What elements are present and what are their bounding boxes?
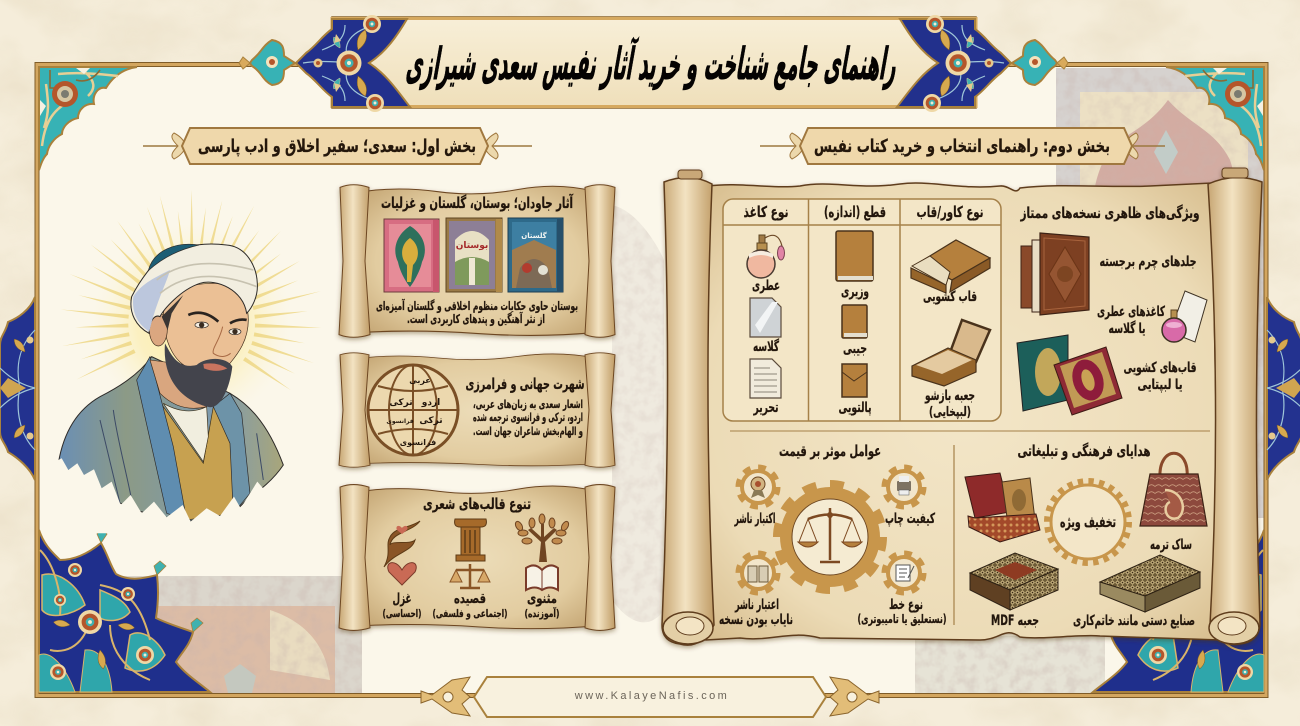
big gear with scales (778, 485, 882, 589)
icon: envelope book (842, 364, 867, 397)
section heading: part one (143, 128, 532, 164)
gear: print quality (885, 468, 923, 506)
brows and eyes (188, 313, 247, 356)
scroll right roll (1208, 168, 1262, 645)
heading: آثار جاودان؛ بوستان، گلستان و غزلیات (381, 194, 574, 212)
corner ornament: top left (39, 67, 137, 170)
medallion: left (239, 40, 295, 85)
footer knot: right (830, 677, 879, 716)
icon: column and scales (450, 519, 490, 588)
label: perfumed paper: کاغذهای عطری (1097, 304, 1166, 320)
scroll paper (706, 183, 1220, 640)
halo (61, 190, 322, 423)
description: بوستان حاوی حکایات منظوم اخلاقی و گلستان آمیزه‌ای (376, 298, 578, 314)
icon: perfume bottle (747, 235, 784, 278)
scroll panel: global fame (339, 353, 615, 467)
turban (131, 244, 257, 333)
label: tahrir: تحریر (753, 400, 778, 416)
label: vaziri: وزیری (841, 284, 869, 300)
label: ghazal: غزل (392, 591, 412, 607)
neck (150, 360, 213, 408)
robe collars (137, 357, 187, 520)
scroll panel: timeless works (339, 185, 615, 337)
label: hinged box: جعبه بازشو (924, 388, 975, 404)
globe: فرانسوی (400, 438, 436, 447)
label: publisher credit: اکتبار ناشر (734, 511, 776, 527)
description line 2: از نثر آهنگین و پندهای کاربردی است. (407, 311, 545, 327)
scroll left roll (662, 170, 714, 645)
banner ornament: left (296, 15, 410, 112)
description line 3: و الهام‌بخش شاعران جهان است. (473, 424, 583, 439)
globe: ترکی (419, 416, 443, 426)
special discount badge (1047, 481, 1129, 563)
scroll background (339, 485, 615, 630)
column heading: size: قطع (اندازه) (824, 203, 886, 221)
globe: عربی (409, 376, 431, 385)
corner ornament: bottom right (1093, 529, 1264, 692)
mouth (203, 363, 227, 371)
book: bustan (446, 218, 502, 292)
side medallion: right (1267, 297, 1300, 480)
column heading: paper: نوع کاغذ (744, 203, 788, 221)
book: golestan: گلستان (521, 231, 548, 240)
faded carpet: bottom left (114, 576, 362, 693)
globe: ترکی (389, 398, 413, 408)
gear: script type (885, 554, 923, 592)
label: rarity: نایاب بودن نسخه (719, 612, 793, 628)
scroll panel: poetic forms (339, 485, 615, 630)
portrait of Saadi (50, 190, 322, 533)
label: pocket: جیبی (843, 341, 867, 357)
label: MDF box: جعبه MDF (991, 613, 1039, 629)
globe: فرانسوی (386, 418, 414, 425)
book: golestan (508, 218, 563, 292)
icon: glossy paper (750, 298, 781, 337)
beard (165, 343, 232, 407)
hair (162, 295, 183, 330)
scroll background (339, 185, 615, 337)
label: hinged box note: (لبپخایی) (929, 405, 971, 420)
icon: pocket book (842, 305, 867, 338)
icon: open box (912, 320, 990, 386)
label: paltoyi: پالتویی (838, 400, 872, 416)
icon: writing paper (750, 359, 781, 398)
label: handcrafts: صنایع دستی مانند خاتم‌کاری (1073, 613, 1195, 629)
label: qasideh note: (اجتماعی و فلسفی) (432, 608, 508, 620)
banner ornament: right (897, 15, 1011, 112)
ear (149, 313, 167, 346)
globe (368, 365, 458, 455)
painterly fade at robe hem (50, 458, 297, 533)
faded carpet: centre strip behind scrolls (612, 205, 664, 622)
label: print quality: کیفیت چاپ (885, 511, 936, 527)
corner ornament: top right (1166, 67, 1264, 170)
section heading text: بخش دوم: راهنمای انتخاب و خرید کتاب نفیس (814, 136, 1110, 157)
icon: teal and red books (1017, 335, 1122, 415)
label: script type: نوع خط (889, 597, 923, 613)
label: termeh bag: ساک ترمه (1150, 537, 1192, 553)
book: ghazaliyat (384, 219, 439, 292)
icon: MDF box (970, 553, 1058, 610)
badge text: تخفیف ویژه (1060, 513, 1116, 531)
label: glossy: گلاسه (753, 338, 780, 355)
label: slipcase: قاب کشویی (923, 289, 977, 305)
corner ornament: bottom left (39, 529, 210, 692)
section heading text: بخش اول: سعدی؛ سفیر اخلاق و ادب پارسی (198, 136, 476, 157)
icon: calligraphy and heart (384, 521, 420, 585)
icon: paper and perfume (1162, 291, 1207, 342)
tunic (150, 383, 233, 520)
gear: publisher reputation (739, 468, 777, 506)
shirt (163, 403, 208, 462)
label: perfumed: عطری (752, 278, 780, 294)
side medallion: left (0, 297, 35, 480)
gear: rarity (739, 554, 777, 592)
medallion: right (1012, 40, 1068, 85)
website address: www.KalayeNafis.com (574, 690, 729, 702)
scroll panel: buying guide (662, 168, 1262, 645)
label: or lap-style: یا لبپتایی (1138, 377, 1182, 393)
label: script note: (نستعلیق یا تامیبوتری) (858, 612, 946, 627)
icon: slipcase (911, 240, 990, 293)
table of book options (723, 199, 1001, 421)
title banner (239, 15, 1068, 112)
icon: termeh bag (1140, 453, 1207, 526)
footer plaque (421, 677, 879, 717)
label: masnavi note: (آموزنده) (524, 607, 560, 620)
section heading: part two (760, 128, 1165, 164)
description line 2: اردو، ترکی و فرانسوی ترجمه شده (473, 410, 583, 425)
faded carpet: bottom right (915, 636, 1105, 693)
heading: شهرت جهانی و فرامرزی (466, 375, 584, 393)
book: bustan: بوستان (456, 241, 488, 251)
column heading: cover: نوع کاور/قاب (916, 203, 984, 221)
icon: leather book (1021, 233, 1089, 315)
scroll background (339, 353, 615, 467)
label: slipcases: قاب‌های کشویی (1124, 360, 1196, 376)
label: masnavi: مثنوی (527, 591, 557, 607)
icon: vaziri book (836, 231, 873, 281)
icon: red gift box (965, 473, 1040, 542)
heading: تنوع قالب‌های شعری (423, 495, 531, 513)
icon: tree and book (514, 514, 570, 590)
label: embossed leather: جلدهای چرم برجسته (1100, 254, 1196, 270)
robe (58, 357, 283, 522)
faded carpet: top right (1056, 68, 1264, 522)
label: qasideh: قصیده (454, 591, 486, 607)
turban cap (148, 244, 199, 271)
face (163, 283, 248, 367)
label: or glossy: یا گلاسه (1108, 320, 1146, 337)
label: publisher reputation: اعتبار ناشر (734, 597, 779, 613)
heading: gifts: هدایای فرهنگی و تبلیغاتی (1018, 442, 1150, 460)
heading: features: ویژگی‌های ظاهری نسخه‌های ممتاز (1020, 204, 1200, 222)
description line 1: اشعار سعدی به زبان‌های عربی، (473, 397, 583, 411)
footer knot: left (421, 677, 470, 716)
icon: khatam box (1100, 555, 1200, 612)
globe: اردو (421, 398, 440, 408)
label: ghazal note: (احساسی) (382, 608, 422, 620)
heading: price factors: عوامل موثر بر قیمت (779, 442, 881, 460)
